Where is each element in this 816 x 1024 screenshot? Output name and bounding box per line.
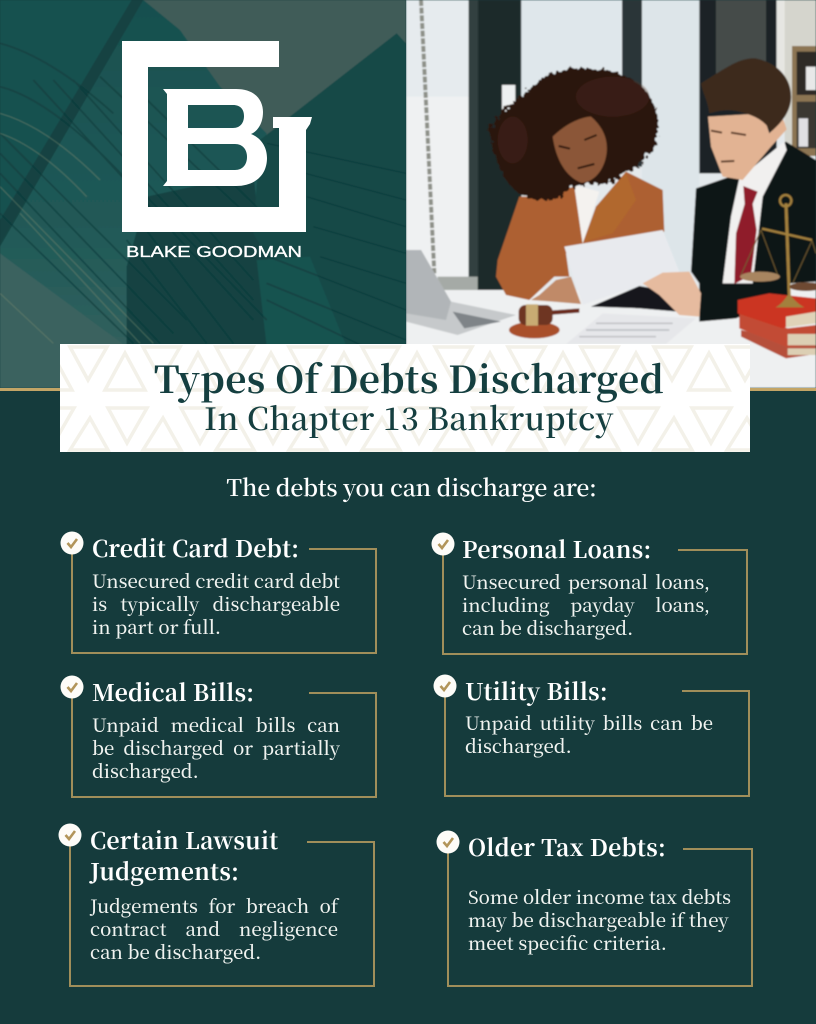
body text: Judgements for breach of: [90, 893, 338, 919]
woman face: [553, 117, 607, 183]
gold divider line: [0, 388, 816, 391]
icon: check: [60, 532, 84, 554]
header photo: lawyer and client reviewing documents: [406, 0, 816, 388]
logo letter B: [163, 89, 267, 186]
body text: Unpaid medical bills can: [92, 712, 340, 738]
card: medical bills: [60, 675, 377, 798]
header photo: green skyscrapers background: [0, 0, 406, 388]
body text: Unpaid utility bills can be: [465, 710, 713, 736]
icon: check: [58, 824, 82, 846]
card: personal loans: including payday loans,: [462, 592, 710, 618]
card: certain lawsuit judgements: contract and negligence: [90, 916, 338, 942]
paper and hand: [564, 230, 679, 305]
card: certain lawsuit judgements: [58, 823, 375, 987]
body text: Unsecured personal loans,: [462, 569, 710, 595]
heading: Medical Bills:: [92, 675, 254, 708]
heading: Certain Lawsuit: [90, 823, 278, 856]
logo frame: [122, 41, 312, 232]
card: credit card debt: is typically dischargeable: [92, 591, 340, 617]
card: personal loans: can be discharged.: [462, 615, 633, 641]
title line 2: In Chapter 13 Bankruptcy: [204, 394, 614, 439]
woman jacket: [496, 172, 664, 300]
card: personal loans: [432, 532, 748, 655]
heading: Personal Loans:: [462, 532, 651, 565]
icon: check: [60, 676, 84, 698]
card: credit card debt: [60, 531, 377, 654]
icon: check: [436, 830, 460, 854]
heading: Credit Card Debt:: [92, 531, 299, 564]
books: [741, 330, 816, 358]
card: older tax debts: may be dischargeable if they: [468, 907, 729, 933]
card: utility bills: discharged.: [465, 733, 572, 759]
card: utility bills: [434, 674, 750, 797]
laptop: [406, 250, 516, 335]
card: medical bills: be discharged or partially: [92, 735, 340, 761]
icon: check: [432, 532, 454, 556]
icon: check: [434, 674, 456, 698]
woman hair: [489, 68, 658, 200]
card: certain lawsuit judgements: Judgements:: [90, 854, 239, 887]
body text: Some older income tax debts: [468, 884, 731, 910]
heading: Older Tax Debts:: [468, 830, 666, 863]
card: older tax debts: meet specific criteria.: [468, 930, 667, 956]
scales: [741, 203, 816, 297]
card: older tax debts: [436, 830, 753, 987]
subheading: The debts you can discharge are:: [226, 470, 597, 503]
title line 1: Types Of Debts Discharged: [154, 350, 664, 404]
man suit: [691, 142, 816, 322]
logo wordmark: BLAKE GOODMAN: [126, 244, 302, 261]
heading: Utility Bills:: [465, 674, 608, 707]
card: credit card debt: in part or full.: [92, 614, 221, 640]
black folder: [591, 286, 678, 312]
logo: Blake Goodman: [122, 41, 312, 261]
card: certain lawsuit judgements: can be discharged.: [90, 939, 261, 965]
body text: Unsecured credit card debt: [92, 568, 340, 594]
card: medical bills: discharged.: [92, 758, 199, 784]
document on table: [566, 313, 696, 344]
man face: [708, 113, 787, 180]
title banner: [60, 344, 750, 452]
banner triangle pattern: [60, 345, 750, 452]
gavel: [509, 322, 560, 338]
